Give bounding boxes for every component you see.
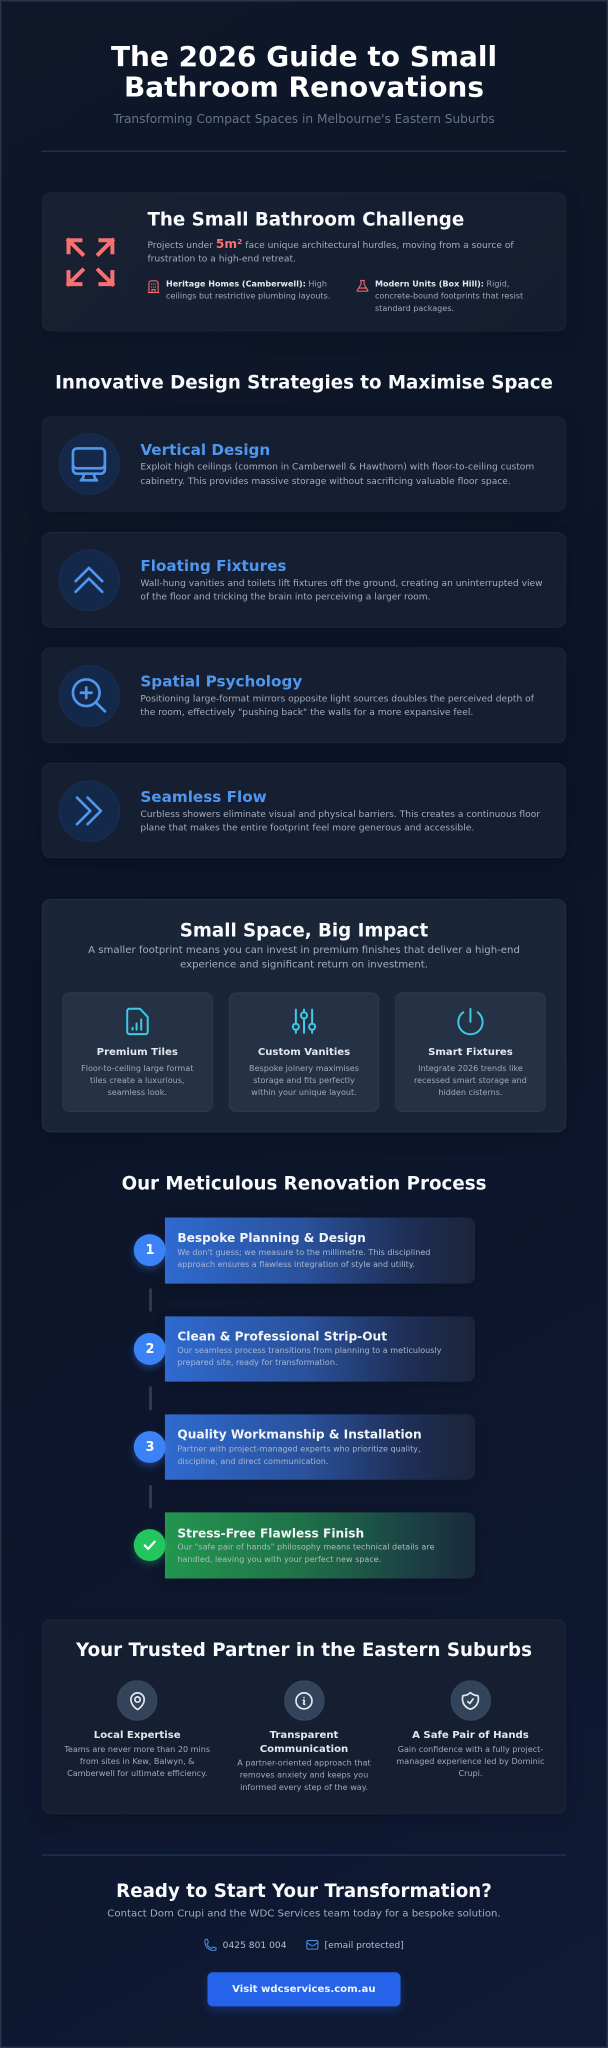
step 1 badge: 1 [145,1243,154,1258]
card text [140,693,534,718]
step text: We don't guess; we measure to the millimetre. This disciplined [177,1248,430,1257]
column text: informed every step of the way. [240,1783,368,1792]
column text: Camberwell for ultimate efficiency. [67,1769,207,1778]
heritage homes note [166,280,330,301]
header [111,40,497,126]
card title: Premium Tiles [97,1047,178,1058]
connector 2 [149,1386,152,1410]
column title [260,1729,348,1755]
connector 1 [149,1288,152,1312]
heading: process: Our Meticulous Renovation Process [122,1172,486,1194]
card title: Vertical Design [140,440,270,459]
column title: Transparent [270,1729,338,1741]
heritage homes note: Heritage Homes (Camberwell): High [166,280,327,289]
step text [177,1543,434,1564]
step 4 badge with check [134,1529,166,1561]
card title: Smart Fixtures [428,1047,513,1058]
icon circle: chevrons up [58,549,120,611]
column: transparent communication [237,1680,371,1792]
column text [396,1745,544,1778]
modern units note: Modern Units (Box Hill): Rigid, [375,280,509,289]
connector 3 [149,1485,152,1509]
card title: Floating Fixtures [140,556,286,575]
step text: Our seamless process transitions from planning to a meticulously [177,1346,441,1355]
step text: handled, leaving you with your perfect new space. [177,1555,381,1564]
card text: Positioning large-format mirrors opposite light sources doubles the perceived depth of [140,693,534,704]
column text: from sites in Kew, Balwyn, & [80,1757,194,1766]
icon: document chart [126,1008,149,1036]
icon: monitor [72,447,106,482]
card text: storage and fits perfectly [253,1076,355,1085]
card text [140,808,540,833]
icon: magnifier [72,678,106,713]
call to action text: Contact Dom Crupi and the WDC Services team today for a bespoke solution. [107,1908,501,1920]
impact text: A smaller footprint means you can invest in premium finishes that deliver a high-end [88,945,520,956]
phone number: 0425 801 004 [223,1939,287,1950]
card title: Spatial Psychology [140,672,302,690]
step text: Our "safe pair of hands" philosophy means technical details are [177,1543,434,1552]
step text: approach ensures a flawless integration of style and utility. [177,1260,415,1269]
panel: trusted partner [42,1619,566,1814]
icon: sliders [292,1008,316,1034]
icon: shield check [450,1681,491,1721]
panel: spatial psychology [42,648,566,743]
step 3 badge [134,1431,166,1463]
challenge text: frustration to a high-end retreat. [147,253,296,264]
heading: trusted partner: Your Trusted Partner in the Eastern Suburbs [76,1639,532,1660]
heading: call to action: Ready to Start Your Transformation? [116,1880,492,1902]
heading: design strategies: Innovative Design Strategies to Maximise Space [55,371,553,393]
icon: envelope [306,1940,318,1950]
contact row [204,1938,404,1951]
column: local expertise [64,1680,210,1778]
column text: A partner-oriented approach that [237,1759,371,1768]
step text [177,1346,442,1368]
modern units note [375,280,523,313]
panel: small bathroom challenge [42,192,566,331]
panel: seamless flow [42,763,566,858]
icon: beaker [356,280,368,292]
icon: chevrons up [74,566,104,594]
card text: within your unique layout. [251,1088,357,1097]
card text: plane that makes the entire footprint feel more generous and accessible. [140,822,474,833]
step 1 badge [134,1234,166,1266]
email: [email protected] [325,1939,404,1950]
modern units note: concrete-bound footprints that resist [375,292,523,301]
card: custom vanities [229,993,379,1112]
heading: impact: Small Space, Big Impact [180,919,428,941]
card text: recessed smart storage and [414,1076,527,1085]
heading: challenge: The Small Bathroom Challenge [147,209,464,230]
challenge text: Projects under 5m² face unique architectural hurdles, moving from a source of [147,236,514,251]
column text: Teams are never more than 20 mins [64,1745,210,1754]
impact text [88,945,520,970]
panel: small space big impact [42,899,566,1132]
icon: chevrons right [76,796,102,826]
column text: managed experience led by Dominic [396,1757,544,1766]
card text [140,577,543,602]
panel: vertical design [42,416,566,512]
step text: Partner with project-managed experts who prioritize quality, [177,1445,421,1454]
card: premium tiles [62,993,212,1112]
title: The 2026 Guide to Small [111,40,497,73]
column: safe pair of hands [396,1680,544,1778]
step 2 card [165,1316,475,1382]
card text [81,1064,194,1097]
column title: Communication [260,1744,348,1755]
card text: Curbless showers eliminate visual and physical barriers. This creates a continuous floor [140,808,540,819]
column text: removes anxiety and keeps you [240,1771,368,1780]
card text [140,462,534,486]
card text: seamless look. [108,1088,167,1097]
step 1 card [165,1218,475,1283]
title: Bathroom Renovations [124,71,484,104]
icon: heritage building [148,280,160,294]
card text: Integrate 2026 trends like [418,1064,523,1073]
icon: power [457,1008,484,1036]
panel: floating fixtures [42,532,566,627]
step title: Bespoke Planning & Design [177,1231,366,1245]
modern units note: standard packages. [375,304,454,313]
card text: of the floor and tricking the brain into perceiving a larger room. [140,591,431,602]
card title: Seamless Flow [140,787,267,805]
card text [414,1064,527,1097]
title [111,40,497,104]
step text [177,1248,430,1269]
impact text: experience and significant return on investment. [180,959,428,970]
card title: Custom Vanities [258,1047,350,1058]
step text [177,1445,421,1466]
card: smart fixtures [395,993,546,1112]
button: Visit wdcservices.com.au [232,1983,376,1995]
icon circle: magnifier [58,665,120,726]
step text: discipline, and direct communication. [177,1457,328,1466]
heritage homes note: ceilings but restrictive plumbing layouts. [166,292,330,301]
icon: phone [204,1938,217,1951]
button [207,1972,400,2007]
column title: A Safe Pair of Hands [412,1729,529,1741]
step 3 badge: 3 [145,1439,154,1455]
card text [249,1064,359,1097]
step 3 card [165,1414,475,1480]
challenge text [147,236,514,264]
card text: tiles create a luxurious, [90,1076,184,1085]
icon: expand arrows [66,237,116,287]
column title: Local Expertise [94,1729,181,1741]
icon: location pin [117,1681,157,1721]
card text: the room, effectively "pushing back" the walls for a more expansive feel. [140,707,473,718]
card text: hidden cisterns. [438,1088,503,1097]
step title: Stress-Free Flawless Finish [177,1526,364,1540]
step 4 card [165,1513,475,1578]
icon circle: chevrons right [58,780,120,842]
icon circle: monitor [58,434,120,495]
step 2 badge: 2 [145,1341,154,1356]
card text: Bespoke joinery maximises [249,1064,359,1073]
card text: cabinetry. This provides massive storage without sacrificing valuable floor space. [140,476,511,486]
icon: info [284,1681,324,1721]
step title: Clean & Professional Strip-Out [177,1329,387,1344]
step 2 badge [134,1333,166,1365]
subtitle: Transforming Compact Spaces in Melbourne's Eastern Suburbs [113,112,495,126]
card text: Floor-to-ceiling large format [81,1064,193,1073]
column text [237,1759,371,1792]
column text: Gain confidence with a fully project- [398,1745,543,1754]
column text [64,1745,210,1778]
card text: Exploit high ceilings (common in Camberwell & Hawthorn) with floor-to-ceiling custom [140,462,534,472]
card text: Wall-hung vanities and toilets lift fixtures off the ground, creating an uninterrupted view [140,577,543,588]
step title: Quality Workmanship & Installation [177,1427,422,1442]
step text: prepared site, ready for transformation. [177,1358,338,1368]
column text: Crupi. [458,1769,482,1778]
